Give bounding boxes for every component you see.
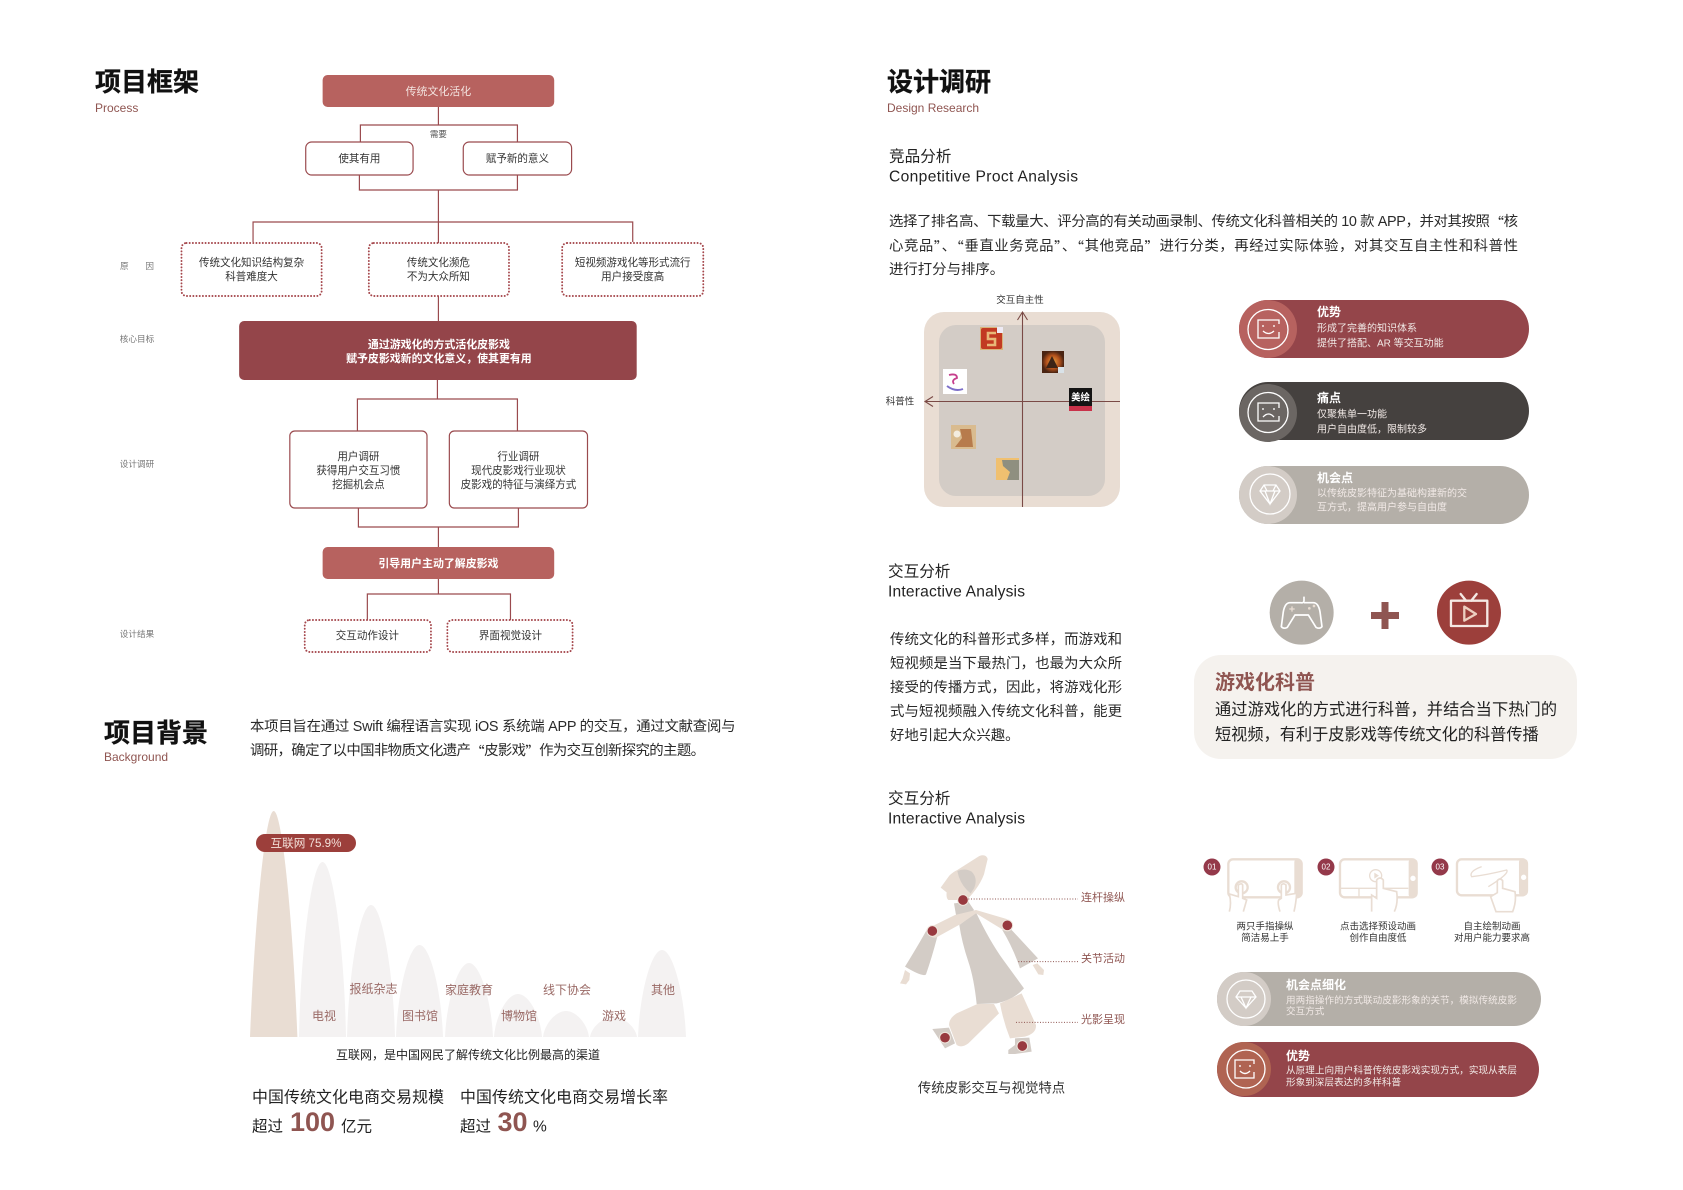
node: guide users: 引导用户主动了解皮影戏 bbox=[378, 556, 499, 570]
node: industry research: 皮影戏的特征与演绎方式 bbox=[461, 478, 577, 491]
callout: opportunity detail: 用两指操作的方式联动皮影形象的关节，模拟传统皮影 bbox=[1286, 994, 1517, 1006]
icon: video tv bbox=[1437, 581, 1501, 645]
stat: e-commerce growth: % bbox=[533, 1118, 547, 1136]
callout: pain points: 仅聚焦单一功能 bbox=[1317, 408, 1387, 420]
heading: competitive analysis: Conpetitive Proct Analysis bbox=[889, 168, 1078, 186]
stat: e-commerce growth: 30 bbox=[498, 1107, 528, 1137]
panel: background bbox=[104, 717, 736, 1137]
chart caption: 互联网，是中国网民了解传统文化比例最高的渠道 bbox=[336, 1047, 600, 1062]
icon: app black: 美绘 bbox=[1071, 392, 1090, 402]
callout: strengths: 提供了搭配、AR 等交互功能 bbox=[1317, 336, 1444, 350]
node: cause 2 bbox=[369, 243, 509, 296]
chart: channels for learning traditional culture: 其他 bbox=[651, 983, 675, 997]
node: traditional culture activation: 传统文化活化 bbox=[406, 84, 471, 98]
step 2: select preset: 创作自由度低 bbox=[1349, 932, 1407, 944]
sleeves bbox=[905, 930, 937, 975]
panel: gamified science: 游戏化科普 bbox=[1215, 670, 1315, 694]
text block: competitive analysis: 选择了排名高、下载量大、评分高的有关动画录制、传统文化科普相关的 10 款 APP，并对其按照“核 bbox=[889, 212, 1518, 232]
heading: interactive analysis 2: Interactive Analysis bbox=[888, 810, 1025, 828]
node: cause 2: 传统文化濒危 bbox=[407, 256, 470, 269]
text block: competitive analysis bbox=[889, 212, 1518, 278]
node: interaction design: 交互动作设计 bbox=[336, 629, 399, 642]
callout: strengths detail: 优势 bbox=[1286, 1048, 1310, 1063]
text block: interactive analysis bbox=[890, 631, 1122, 744]
callout: opportunities: 以传统皮影特征为基础构建新的交 bbox=[1317, 486, 1467, 500]
icon: frown bbox=[1248, 392, 1288, 432]
icon: game controller bbox=[1270, 581, 1334, 645]
heading: interactive analysis 1: 交互分析 bbox=[888, 562, 950, 580]
chart: channels for learning traditional culture: 家庭教育 bbox=[445, 982, 493, 997]
icon: plus bbox=[1371, 602, 1399, 629]
title: background: 项目背景 bbox=[104, 718, 208, 748]
callout: strengths bbox=[1239, 300, 1529, 358]
side label: causes: 原 因 bbox=[120, 261, 154, 271]
step 2: select preset bbox=[1318, 858, 1417, 944]
axis label: autonomy: 交互自主性 bbox=[996, 294, 1044, 306]
chart: channels for learning traditional culture: 线下协会 bbox=[543, 982, 591, 997]
node: visual design bbox=[447, 620, 573, 652]
callout: pain points: 痛点 bbox=[1317, 390, 1341, 405]
node: traditional culture activation bbox=[323, 75, 554, 107]
node: interaction design bbox=[305, 620, 431, 652]
heading: interactive analysis 2: 交互分析 bbox=[888, 790, 950, 808]
heading: interactive analysis 1: Interactive Analysis bbox=[888, 584, 1025, 600]
node: industry research bbox=[449, 431, 587, 508]
callout: pain points: 用户自由度低，限制较多 bbox=[1317, 422, 1427, 436]
icon: app red bbox=[980, 327, 1003, 350]
text block: interactive analysis: 好地引起大众兴趣。 bbox=[890, 727, 1020, 744]
callout: internet share: 互联网 75.9% bbox=[271, 836, 341, 850]
figure labels: 光影呈现 bbox=[1081, 1012, 1125, 1026]
leader lines bbox=[968, 899, 1078, 1022]
flowchart bbox=[181, 75, 703, 652]
icon: app yellow bbox=[996, 458, 1019, 480]
callout: strengths detail: 从原理上向用户科普传统皮影戏实现方式，实现从表层 bbox=[1286, 1064, 1517, 1076]
text block: competitive analysis: 进行打分与排序。 bbox=[889, 261, 1004, 278]
robe bbox=[959, 912, 1024, 1004]
heading: interactive analysis 1 bbox=[888, 562, 1025, 600]
step 1: two fingers: 两只手指操纵 bbox=[1236, 920, 1294, 932]
node: make it useful bbox=[306, 142, 413, 175]
node: cause 1: 传统文化知识结构复杂 bbox=[199, 256, 305, 269]
title: design research bbox=[887, 67, 991, 115]
node: industry research: 行业调研 bbox=[497, 450, 540, 463]
callout: opportunity detail: 交互方式 bbox=[1286, 1006, 1325, 1018]
stat: e-commerce scale: 中国传统文化电商交易规模 bbox=[252, 1088, 444, 1106]
callout: strengths: 形成了完善的知识体系 bbox=[1317, 322, 1417, 334]
step 1: two fingers: 简洁易上手 bbox=[1241, 932, 1289, 944]
node: guide users bbox=[323, 547, 554, 579]
node: give new meaning: 赋予新的意义 bbox=[486, 152, 549, 165]
chart: channels for learning traditional culture: 游戏 bbox=[602, 1009, 626, 1023]
axes bbox=[925, 312, 1120, 507]
title: process: Process bbox=[95, 101, 138, 115]
hands bbox=[900, 970, 910, 984]
panel: process framework bbox=[95, 67, 703, 652]
icon: phone with drawing bbox=[1457, 859, 1528, 912]
text block: interactive analysis: 传统文化的科普形式多样，而游戏和 bbox=[890, 631, 1122, 648]
icon: diamond bbox=[1250, 474, 1290, 514]
step 3: free drawing bbox=[1432, 858, 1530, 944]
step 3: free drawing: 对用户能力要求高 bbox=[1454, 932, 1530, 944]
figure labels: 关节活动 bbox=[1081, 951, 1125, 965]
stat: e-commerce scale bbox=[252, 1088, 444, 1137]
callout: opportunities bbox=[1239, 466, 1529, 524]
icon: smile bbox=[1248, 310, 1288, 350]
callout: opportunities: 互方式，提高用户参与自由度 bbox=[1317, 500, 1447, 514]
node: industry research: 现代皮影戏行业现状 bbox=[471, 464, 566, 477]
title: process: 项目框架 bbox=[95, 67, 199, 97]
stat: e-commerce scale: 超过 bbox=[252, 1118, 283, 1136]
node: cause 3 bbox=[562, 243, 703, 296]
node: visual design: 界面视觉设计 bbox=[479, 629, 542, 642]
node: give new meaning bbox=[463, 142, 572, 175]
panel: gamified science: 短视频，有利于皮影戏等传统文化的科普传播 bbox=[1215, 726, 1539, 744]
node: cause 2: 不为大众所知 bbox=[407, 270, 470, 283]
text block: background intro: 调研，确定了以中国非物质文化遗产“皮影戏”作为交互创新探究的主题。 bbox=[250, 740, 705, 762]
stat: e-commerce growth: 中国传统文化电商交易增长率 bbox=[460, 1088, 668, 1106]
step 2: select preset: 点击选择预设动画 bbox=[1340, 920, 1416, 932]
head and hat bbox=[941, 855, 988, 900]
chart: channels for learning traditional culture: 电视 bbox=[312, 1008, 336, 1023]
callout: opportunity detail bbox=[1217, 972, 1541, 1026]
side label: design research: 设计调研 bbox=[120, 458, 155, 469]
figure labels bbox=[1081, 890, 1125, 1026]
icon: app black bbox=[1069, 388, 1092, 411]
heading: competitive analysis: 竞品分析 bbox=[889, 148, 951, 166]
callout: strengths detail: 形象到深层表达的多样科普 bbox=[1286, 1076, 1402, 1088]
node: cause 3: 用户接受度高 bbox=[601, 270, 664, 283]
legs and feet bbox=[1000, 993, 1036, 1038]
step 3: free drawing: 03 bbox=[1436, 862, 1445, 872]
callout: internet share bbox=[256, 834, 356, 852]
heading: competitive analysis bbox=[889, 148, 1078, 186]
text block: interactive analysis: 接受的传播方式，因此，将游戏化形 bbox=[890, 679, 1122, 696]
label: need: 需要 bbox=[430, 129, 447, 139]
step 2: select preset: 02 bbox=[1322, 862, 1331, 872]
step 1: two fingers: 01 bbox=[1208, 862, 1217, 872]
flowchart connectors bbox=[253, 107, 633, 620]
icon: diamond bbox=[1227, 980, 1265, 1018]
node: cause 1 bbox=[181, 243, 322, 296]
chart: competitor quadrant bbox=[886, 294, 1120, 507]
callout: opportunities: 机会点 bbox=[1317, 470, 1353, 485]
shoulders bbox=[927, 910, 1012, 938]
node: user research: 挖掘机会点 bbox=[332, 478, 385, 491]
panel: gamified science bbox=[1194, 655, 1577, 759]
title: background bbox=[104, 718, 208, 764]
chart: channels for learning traditional culture: 博物馆 bbox=[501, 1008, 537, 1023]
stat: e-commerce scale: 亿元 bbox=[341, 1118, 372, 1136]
side label: design result: 设计结果 bbox=[120, 628, 155, 639]
stat: e-commerce growth bbox=[460, 1088, 668, 1137]
node: cause 1: 科普难度大 bbox=[225, 270, 278, 283]
node: core goal: 通过游戏化的方式活化皮影戏 bbox=[368, 337, 510, 351]
callout: opportunity detail: 机会点细化 bbox=[1286, 977, 1346, 992]
text block: background intro bbox=[250, 717, 736, 762]
icon: app fire bbox=[1042, 351, 1064, 373]
node: cause 3: 短视频游戏化等形式流行 bbox=[575, 256, 691, 269]
callout: strengths: 优势 bbox=[1317, 304, 1341, 319]
node: user research: 用户调研 bbox=[337, 450, 380, 463]
title: background: Background bbox=[104, 750, 168, 764]
node: user research bbox=[290, 431, 427, 508]
title: design research: 设计调研 bbox=[887, 67, 991, 97]
text block: background intro: 本项目旨在通过 Swift 编程语言实现 iOS 系统端 APP 的交互，通过文献查阅与 bbox=[250, 717, 736, 735]
heading: interactive analysis 2 bbox=[888, 790, 1025, 828]
icon: app white bbox=[943, 369, 967, 394]
icon: phone with tap bbox=[1340, 859, 1417, 912]
text block: interactive analysis: 式与短视频融入传统文化科普，能更 bbox=[890, 703, 1122, 720]
icon: app shadow puppet bbox=[951, 425, 976, 449]
node: user research: 获得用户交互习惯 bbox=[316, 464, 401, 477]
node: core goal bbox=[239, 321, 637, 380]
text block: interactive analysis: 短视频是当下最热门，也最为大众所 bbox=[890, 655, 1122, 672]
title: design research: Design Research bbox=[887, 101, 979, 115]
callout: strengths detail bbox=[1217, 1042, 1539, 1097]
step 3: free drawing: 自主绘制动画 bbox=[1463, 920, 1521, 932]
stat: e-commerce scale: 100 bbox=[290, 1107, 335, 1137]
title: process bbox=[95, 67, 199, 115]
chart: channels for learning traditional culture: 报纸杂志 bbox=[349, 981, 398, 996]
figure caption: 传统皮影交互与视觉特点 bbox=[918, 1080, 1065, 1096]
stat: e-commerce growth: 超过 bbox=[460, 1118, 491, 1136]
icon: phone with two hands bbox=[1228, 859, 1302, 912]
chart: channels for learning traditional culture bbox=[250, 811, 686, 1037]
figure labels: 连杆操纵 bbox=[1081, 890, 1125, 904]
panel: design research bbox=[886, 67, 1577, 1097]
illustration: shadow puppet figure bbox=[900, 855, 1078, 1054]
step 1: two fingers bbox=[1204, 858, 1302, 944]
text block: competitive analysis: 心竞品”、“垂直业务竞品”、“其他竞品”进行分类，再经过实际体验，对其交互自主性和科普性 bbox=[889, 236, 1518, 257]
icon: smile bbox=[1227, 1050, 1265, 1088]
node: core goal: 赋予皮影戏新的文化意义，使其更有用 bbox=[346, 351, 532, 365]
callout: pain points bbox=[1239, 382, 1529, 442]
axis label: science: 科普性 bbox=[886, 396, 915, 408]
node: make it useful: 使其有用 bbox=[338, 152, 380, 165]
joints bbox=[927, 895, 1028, 1051]
chart: channels for learning traditional culture: 图书馆 bbox=[402, 1008, 438, 1023]
panel: gamified science: 通过游戏化的方式进行科普，并结合当下热门的 bbox=[1215, 701, 1557, 719]
side label: core goal: 核心目标 bbox=[120, 333, 155, 344]
